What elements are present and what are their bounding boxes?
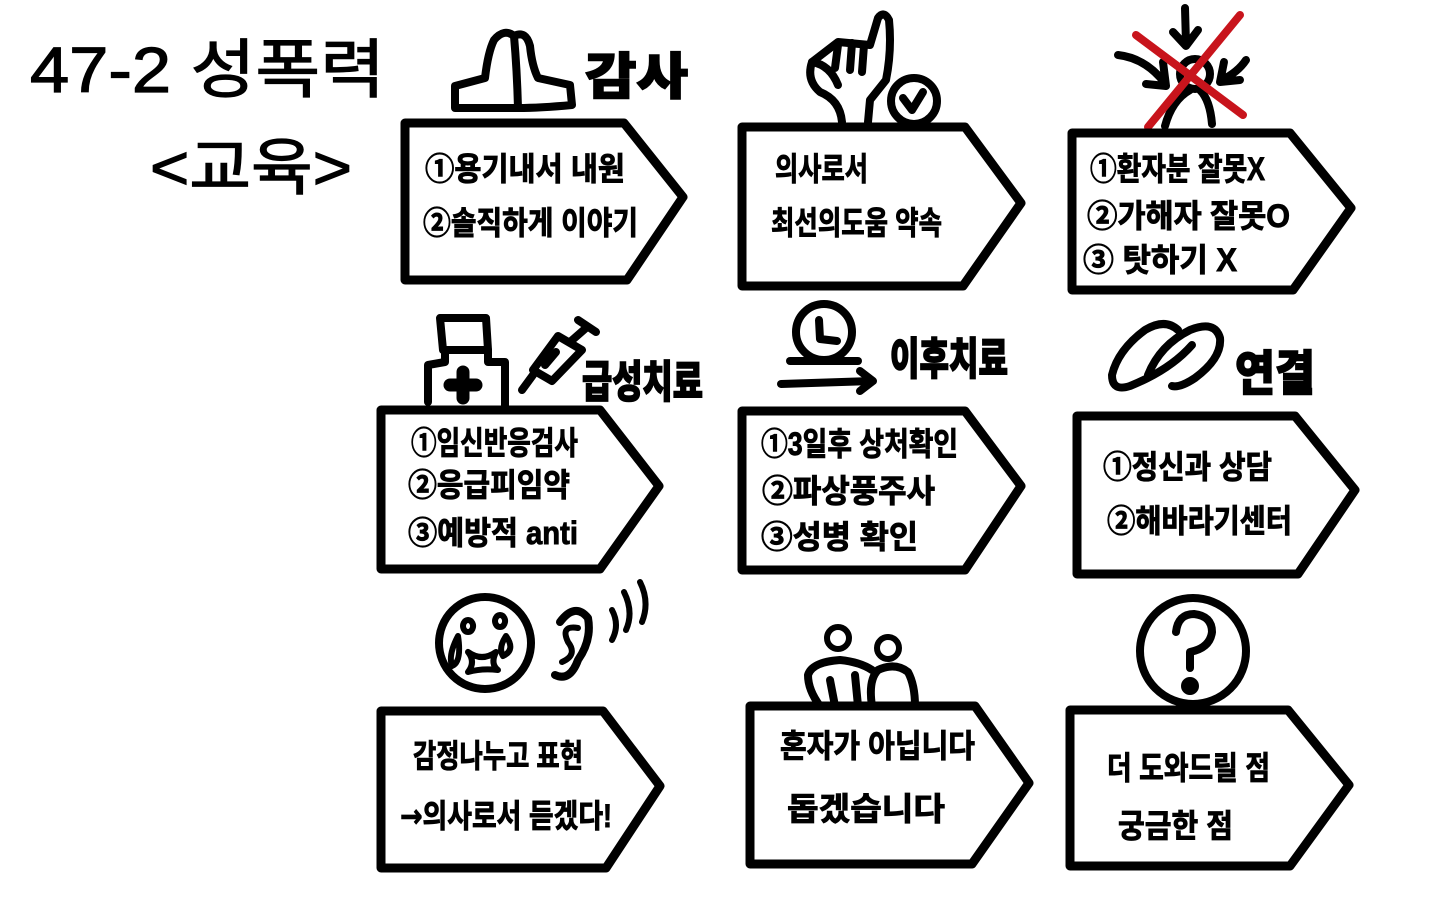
panel: acute treatment [381, 410, 659, 569]
subtitle: <교육> [150, 134, 352, 203]
panel: share feelings [381, 711, 660, 868]
text: as a doctor: 의사로서 [775, 151, 868, 187]
text: no blaming: ③ 탓하기 X [1083, 242, 1238, 278]
heading: thanks: 감사 [585, 49, 688, 105]
text: preventive antibiotics: ③예방적 anti [408, 515, 578, 551]
title: 47-2 성폭력 [30, 34, 385, 106]
icon: syringe [522, 320, 596, 390]
icon: chain link [1112, 324, 1220, 388]
text: wound check: ①3일후 상처확인 [761, 426, 958, 462]
text: will listen as a doctor: →의사로서 듣겠다! [400, 797, 612, 835]
panel: follow-up treatment [742, 411, 1021, 570]
text: sunflower center: ②해바라기센터 [1107, 503, 1292, 539]
text: questions: 궁금한 점 [1118, 808, 1233, 844]
text: psychiatry counseling: ①정신과 상담 [1103, 449, 1272, 485]
icon: crying face [439, 597, 531, 689]
panel: questions [1070, 710, 1349, 866]
text: tetanus shot: ②파상풍주사 [762, 473, 935, 509]
text: perpetrator at fault: ②가해자 잘못O [1087, 198, 1290, 234]
icon: question mark [1140, 598, 1246, 704]
text: pregnancy test: ①임신반응검사 [411, 425, 578, 461]
text: emergency contraception: ②응급피임약 [408, 467, 570, 503]
text: thanks step 2: ②솔직하게 이야기 [423, 205, 638, 241]
icon: crossed out blame [1118, 8, 1246, 127]
heading: acute treatment: 급성치료 [582, 358, 703, 407]
panel: thanks [405, 123, 683, 280]
text: you are not alone: 혼자가 아닙니다 [780, 728, 975, 764]
heading: follow-up treatment: 이후치료 [890, 335, 1008, 384]
icon: praying hands [455, 33, 572, 108]
icon: listening ear [555, 582, 646, 677]
icon: medicine bottle [428, 318, 505, 407]
text: express feelings: 감정나누고 표현 [413, 738, 583, 774]
text: further help: 더 도와드릴 점 [1107, 750, 1270, 786]
text: STD check: ③성병 확인 [761, 519, 918, 555]
text: best help promise: 최선의도움 약속 [771, 205, 942, 241]
text: thanks step 1: ①용기내서 내원 [425, 151, 625, 187]
text: patient not at fault: ①환자분 잘못X [1090, 151, 1266, 187]
heading: connection: 연결 [1235, 348, 1315, 401]
icon: raised finger and check [810, 14, 937, 124]
panel: connection [1077, 416, 1355, 574]
icon: clock and arrow [781, 304, 873, 391]
panel: not your fault [1072, 133, 1351, 290]
text: we will help: 돕겠습니다 [787, 791, 945, 827]
panel: not alone [750, 706, 1029, 864]
panel: doctor promise [742, 127, 1021, 286]
icon: two people [808, 627, 915, 706]
